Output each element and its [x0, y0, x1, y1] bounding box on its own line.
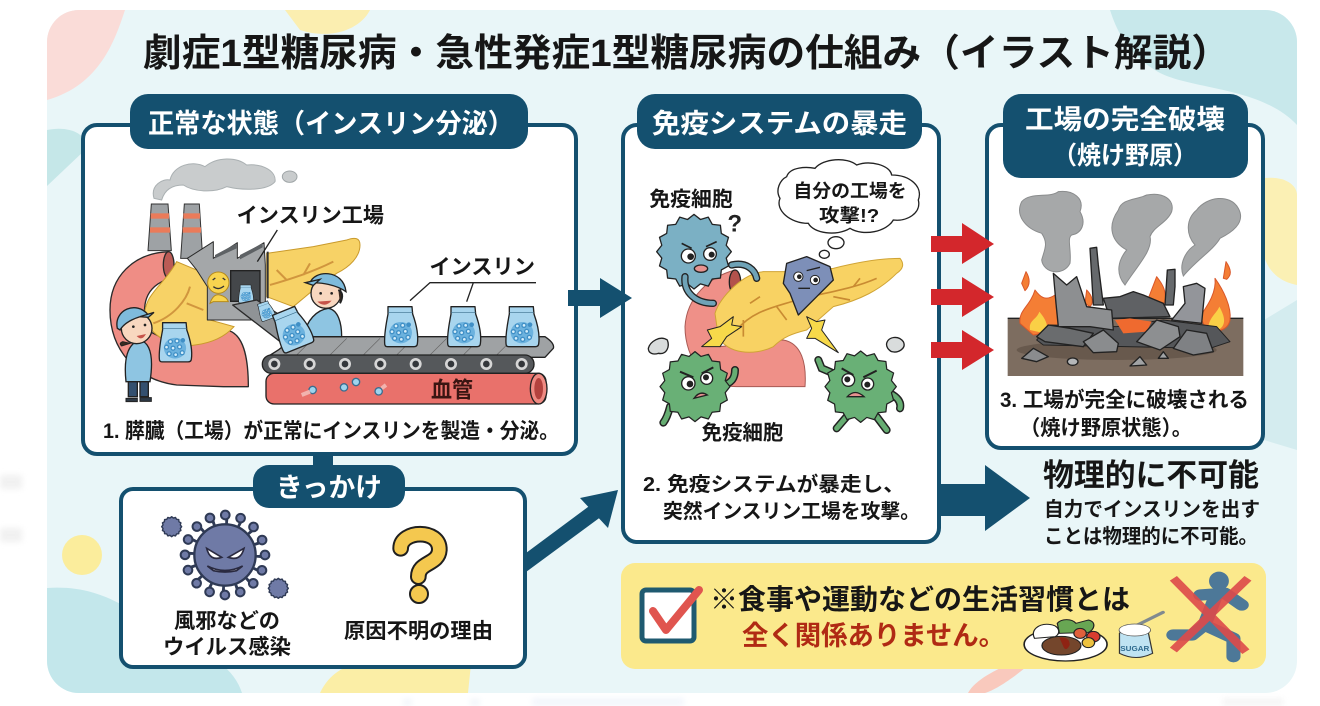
heading: complete destruction: （焼け野原）: [1053, 142, 1197, 170]
background outside card: faint ghost marks: [0, 475, 1283, 706]
illustration: immune cells attacking pancreas: ?: [727, 211, 742, 238]
caption 2: 2. 免疫システムが暴走し、: [643, 472, 905, 496]
illustration: pancreas factory and conveyor: [110, 159, 554, 404]
label: viral infection: [163, 610, 291, 659]
icon: plate of food: [1024, 620, 1107, 661]
title: 劇症1型糖尿病・急性発症1型糖尿病の仕組み（イラスト解説）: [143, 33, 1230, 75]
label: insulin: インスリン: [429, 256, 535, 279]
pancreas: [145, 262, 234, 346]
illustration: immune cells attacking pancreas: [648, 160, 919, 444]
heading: complete destruction: 工場の完全破壊: [1025, 105, 1225, 135]
left worker: [117, 308, 192, 402]
caption 3: 3. 工場が完全に破壊される: [1000, 388, 1249, 412]
bags on conveyor: [385, 307, 418, 347]
puffs: [648, 338, 668, 354]
icon: checkbox: [642, 590, 699, 641]
smoke columns: [1020, 191, 1083, 272]
icon: runner crossed out: [1173, 572, 1248, 657]
icon: sugar jar: SUGAR: [1120, 645, 1150, 653]
chute: [233, 300, 313, 347]
panel: normal state: [83, 94, 576, 454]
heading: immune system runaway: [637, 94, 922, 149]
stomach tube: [110, 252, 248, 387]
caption 1: 1. 膵臓（工場）が正常にインスリンを製造・分泌。: [103, 419, 559, 443]
note text: 全く関係ありません。: [742, 621, 1005, 651]
callout: lifestyle note: [621, 563, 1266, 669]
label: immune cell bottom: 免疫細胞: [702, 421, 784, 444]
impact sparks: [702, 317, 742, 347]
label: viral infection: ウイルス感染: [163, 635, 291, 659]
label: immune cell top: 免疫細胞: [649, 188, 733, 211]
caption 2: 突然インスリン工場を攻撃。: [663, 499, 920, 523]
heading: normal state: 正常な状態（インスリン分泌）: [148, 109, 514, 139]
conclusion text: [1043, 458, 1260, 548]
factory: [187, 242, 265, 320]
thought bubble: [778, 160, 919, 233]
conveyor belt: [267, 337, 554, 357]
heading: trigger: きっかけ: [276, 473, 382, 503]
label: unknown cause: 原因不明の理由: [344, 620, 493, 643]
label: insulin factory: インスリン工場: [237, 205, 384, 228]
right worker: [269, 274, 346, 354]
green cell left: [663, 370, 735, 423]
blue-grey cell on pancreas: [783, 257, 833, 315]
conclusion text: 自力でインスリンを出す: [1044, 498, 1260, 521]
label lines: [257, 230, 536, 302]
arrow: trigger to panel 2: [526, 490, 618, 572]
illustration: pancreas factory and conveyor: 血管: [431, 377, 473, 402]
flames: [1020, 262, 1230, 335]
conclusion text: ことは物理的に不可能。: [1044, 525, 1258, 548]
heading: complete destruction: [1003, 94, 1248, 178]
rubble: [1022, 320, 1213, 366]
heading: trigger: [253, 465, 405, 508]
caption 2: [643, 472, 920, 523]
icon: virus: [162, 515, 439, 603]
caption 3: [1000, 388, 1249, 440]
icon: question mark: [401, 534, 439, 577]
arrow: panel 1 to panel 2: [568, 278, 632, 318]
note text: ※食事や運動などの生活習慣とは: [710, 584, 1130, 615]
pancreas: [715, 258, 903, 352]
illustration: immune cells attacking pancreas: 自分の工場を: [793, 181, 907, 202]
arrow: panel 2 to conclusion: [940, 465, 1030, 531]
chimneys: [148, 204, 203, 258]
green cell right: [818, 360, 900, 430]
smoke: [153, 159, 275, 200]
stomach: [685, 270, 805, 387]
label: viral infection: 風邪などの: [174, 610, 280, 633]
note text: [710, 584, 1130, 651]
red arrows: [931, 223, 994, 370]
ruined walls: [1103, 292, 1170, 318]
illustration: immune cells attacking pancreas: 攻撃!?: [819, 205, 879, 226]
blue cell: [657, 214, 731, 289]
illustration: burned ruins: [1008, 191, 1243, 376]
conclusion text: 物理的に不可能: [1043, 458, 1259, 493]
ground: [1008, 318, 1243, 376]
heading: immune system runaway: 免疫システムの暴走: [652, 109, 907, 139]
caption 3: （焼け野原状態）。: [1020, 417, 1192, 440]
panel: complete destruction: [987, 94, 1263, 448]
connector: panel 1 to trigger panel: [313, 455, 333, 471]
icon: sugar jar: [1119, 612, 1163, 657]
blood vessel: [266, 373, 546, 404]
panel: trigger: [121, 465, 525, 667]
panel: immune system runaway: [623, 94, 939, 542]
heading: normal state: [130, 94, 528, 149]
